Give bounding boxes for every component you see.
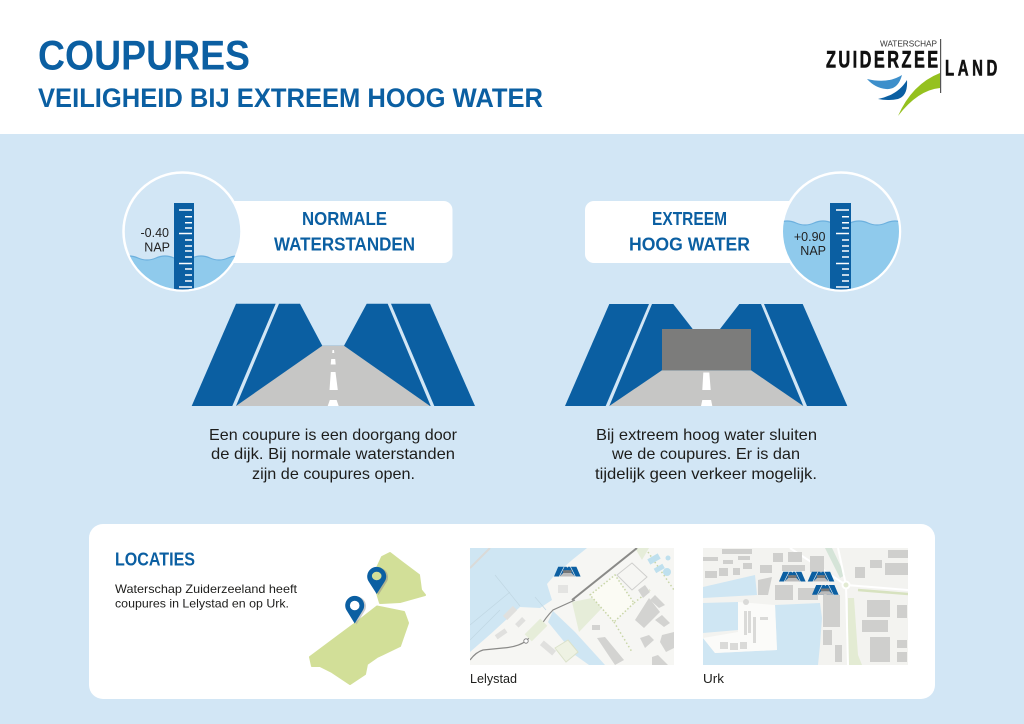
logo: Waterschap Zuiderzeeland: ZUIDERZEE bbox=[826, 47, 938, 74]
label pill: normale waterstanden bbox=[200, 201, 452, 263]
text: explanation normal water: de dijk. Bij normale waterstanden bbox=[211, 446, 455, 463]
panel: locaties bbox=[89, 524, 935, 699]
water gauge: +0.90 NAP: NAP bbox=[800, 244, 826, 258]
icons: coupure markers Urk bbox=[779, 572, 839, 595]
label pill: normale waterstanden: NORMALE bbox=[302, 208, 387, 229]
water gauge: -0.40 NAP bbox=[122, 171, 240, 292]
map: Lelystad bbox=[470, 548, 674, 665]
header band bbox=[0, 0, 1024, 134]
title: COUPURES bbox=[38, 32, 250, 78]
water gauge: +0.90 NAP: +0.90 bbox=[794, 230, 826, 244]
text: explanation extreme water: Bij extreem hoog water sluiten bbox=[596, 427, 817, 444]
text: explanation normal water: Een coupure is een doorgang door bbox=[209, 427, 458, 444]
text: locaties description: Waterschap Zuiderzeeland heeft bbox=[115, 582, 298, 596]
water gauge: -0.40 NAP: -0.40 bbox=[140, 226, 169, 240]
logo: Waterschap Zuiderzeeland: WATERSCHAP bbox=[880, 38, 937, 48]
label pill: normale waterstanden: WATERSTANDEN bbox=[274, 234, 415, 255]
text: locaties description: coupures in Lelystad en op Urk. bbox=[115, 596, 289, 610]
water gauge: +0.90 NAP bbox=[783, 171, 902, 292]
label pill: extreem hoog water: EXTREEM bbox=[652, 208, 727, 229]
map: Urk bbox=[703, 548, 908, 665]
text: explanation extreme water: tijdelijk geen verkeer mogelijk. bbox=[595, 466, 817, 483]
water gauge: -0.40 NAP: NAP bbox=[144, 240, 170, 254]
panel: extreme high water bbox=[565, 172, 904, 483]
logo: Waterschap Zuiderzeeland bbox=[826, 38, 997, 116]
text: explanation extreme water bbox=[595, 427, 817, 483]
icon: coupure marker Lelystad bbox=[554, 567, 581, 576]
subtitle: VEILIGHEID BIJ EXTREEM HOOG WATER bbox=[38, 83, 543, 113]
illustration: open coupure bbox=[192, 304, 475, 406]
heading: locaties: LOCATIES bbox=[115, 549, 195, 570]
logo: Waterschap Zuiderzeeland: LAND bbox=[945, 56, 997, 80]
map: Flevoland with pins bbox=[310, 553, 425, 684]
text: explanation normal water: zijn de coupures open. bbox=[252, 466, 415, 483]
caption: Lelystad: Lelystad bbox=[470, 672, 517, 686]
label pill: extreem hoog water bbox=[585, 201, 805, 263]
illustration: closed coupure bbox=[565, 304, 847, 406]
pin: Lelystad bbox=[345, 596, 366, 624]
pin: Urk bbox=[367, 567, 388, 595]
text: explanation normal water bbox=[209, 427, 458, 483]
text: locaties description bbox=[115, 582, 298, 610]
caption: Urk: Urk bbox=[703, 672, 725, 686]
panel: normal water levels bbox=[120, 172, 475, 483]
label pill: extreem hoog water: HOOG WATER bbox=[629, 234, 750, 255]
text: explanation extreme water: we de coupures. Er is dan bbox=[611, 446, 800, 463]
